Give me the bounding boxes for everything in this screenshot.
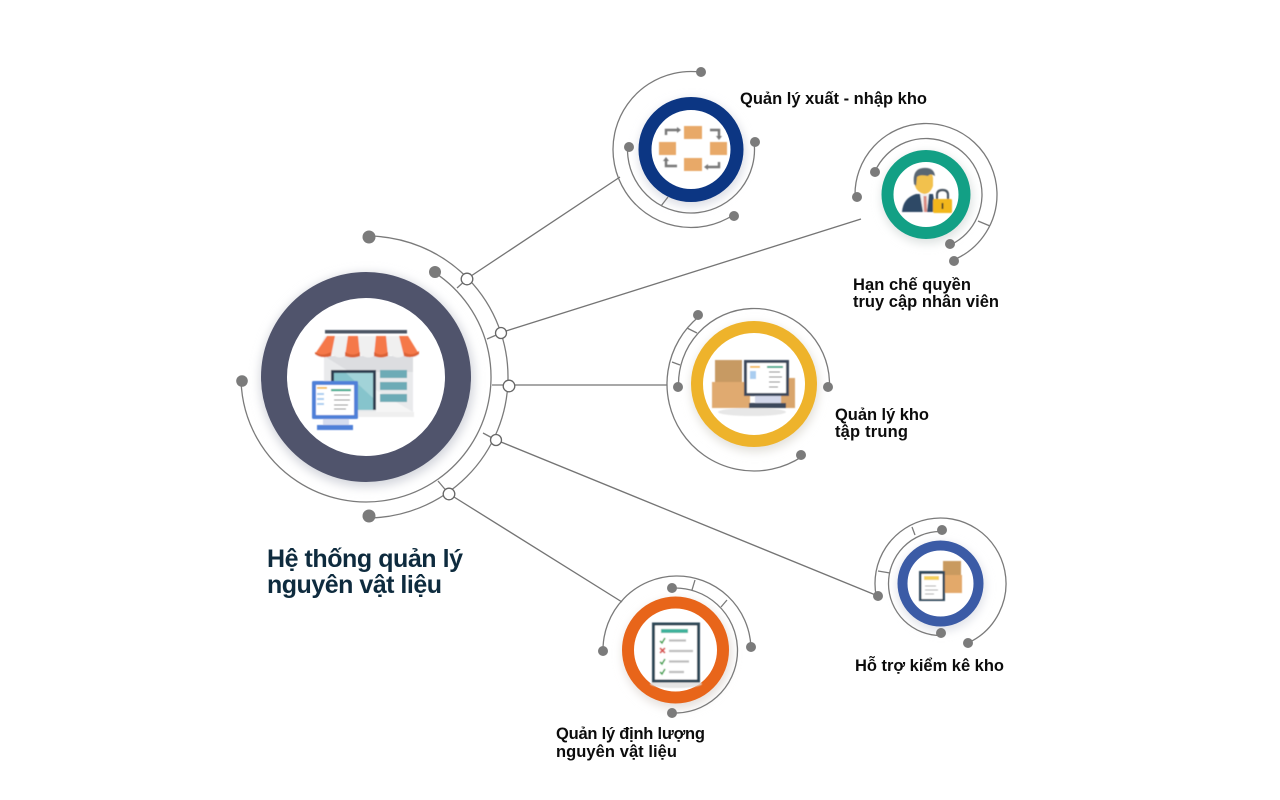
label: material quantity management (556, 725, 705, 761)
end dots (598, 583, 756, 718)
module: stocktake support (863, 506, 1018, 661)
label: centralized warehouse: Quản lý kho (835, 406, 929, 424)
ring shadow (888, 160, 966, 236)
label: staff access restriction (853, 276, 999, 311)
ring (902, 546, 978, 622)
title (267, 545, 463, 599)
hub ring (274, 285, 458, 469)
label: warehouse in/out: Quản lý xuất - nhập kho (740, 90, 927, 108)
orbit arcs (852, 121, 1000, 268)
icon: boxes and monitor (712, 360, 795, 416)
connector lines (454, 177, 878, 602)
label: centralized warehouse: tập trung (835, 423, 908, 441)
label: stocktake support: Hỗ trợ kiểm kê kho (855, 656, 1004, 675)
module: warehouse in/out (583, 42, 799, 257)
orbit arcs (602, 575, 752, 725)
title: nguyên vật liệu (267, 571, 442, 599)
hub ring shadow (275, 288, 459, 472)
ring (628, 602, 723, 698)
module: material quantity management (598, 575, 756, 725)
orbit arcs (583, 42, 799, 257)
ring shadow (903, 549, 979, 625)
ring shadow (646, 107, 738, 199)
main hub: store system (193, 204, 539, 550)
end dots (624, 67, 760, 221)
label: centralized warehouse (835, 406, 929, 441)
hub end dots (236, 230, 441, 522)
hub connector nodes (443, 273, 515, 500)
end dots (873, 525, 973, 648)
icon: man with padlock (902, 168, 952, 213)
icon: checklist (650, 624, 702, 688)
end dots (673, 310, 833, 460)
ring shadow (698, 331, 812, 445)
label: material quantity management: nguyên vật liệu (556, 743, 677, 761)
orbit arcs (633, 263, 875, 505)
ring (645, 104, 737, 196)
ring (888, 156, 964, 233)
icon: boxes cycle (659, 126, 727, 171)
title: Hệ thống quản lý (267, 545, 463, 573)
hub orbit arcs (193, 204, 539, 550)
ring (697, 327, 811, 441)
ring shadow (630, 606, 724, 702)
icon: store with monitor (312, 330, 419, 430)
label: staff access restriction: truy cập nhân viên (853, 293, 999, 311)
end dots (852, 167, 959, 266)
label: material quantity management: Quản lý định lượng (556, 725, 705, 743)
icon: clipboard and boxes (919, 561, 962, 601)
module: centralized warehouse (633, 263, 875, 505)
module: staff access restriction (852, 121, 1000, 268)
orbit arcs (863, 506, 1018, 661)
label: staff access restriction: Hạn chế quyền (853, 276, 971, 294)
